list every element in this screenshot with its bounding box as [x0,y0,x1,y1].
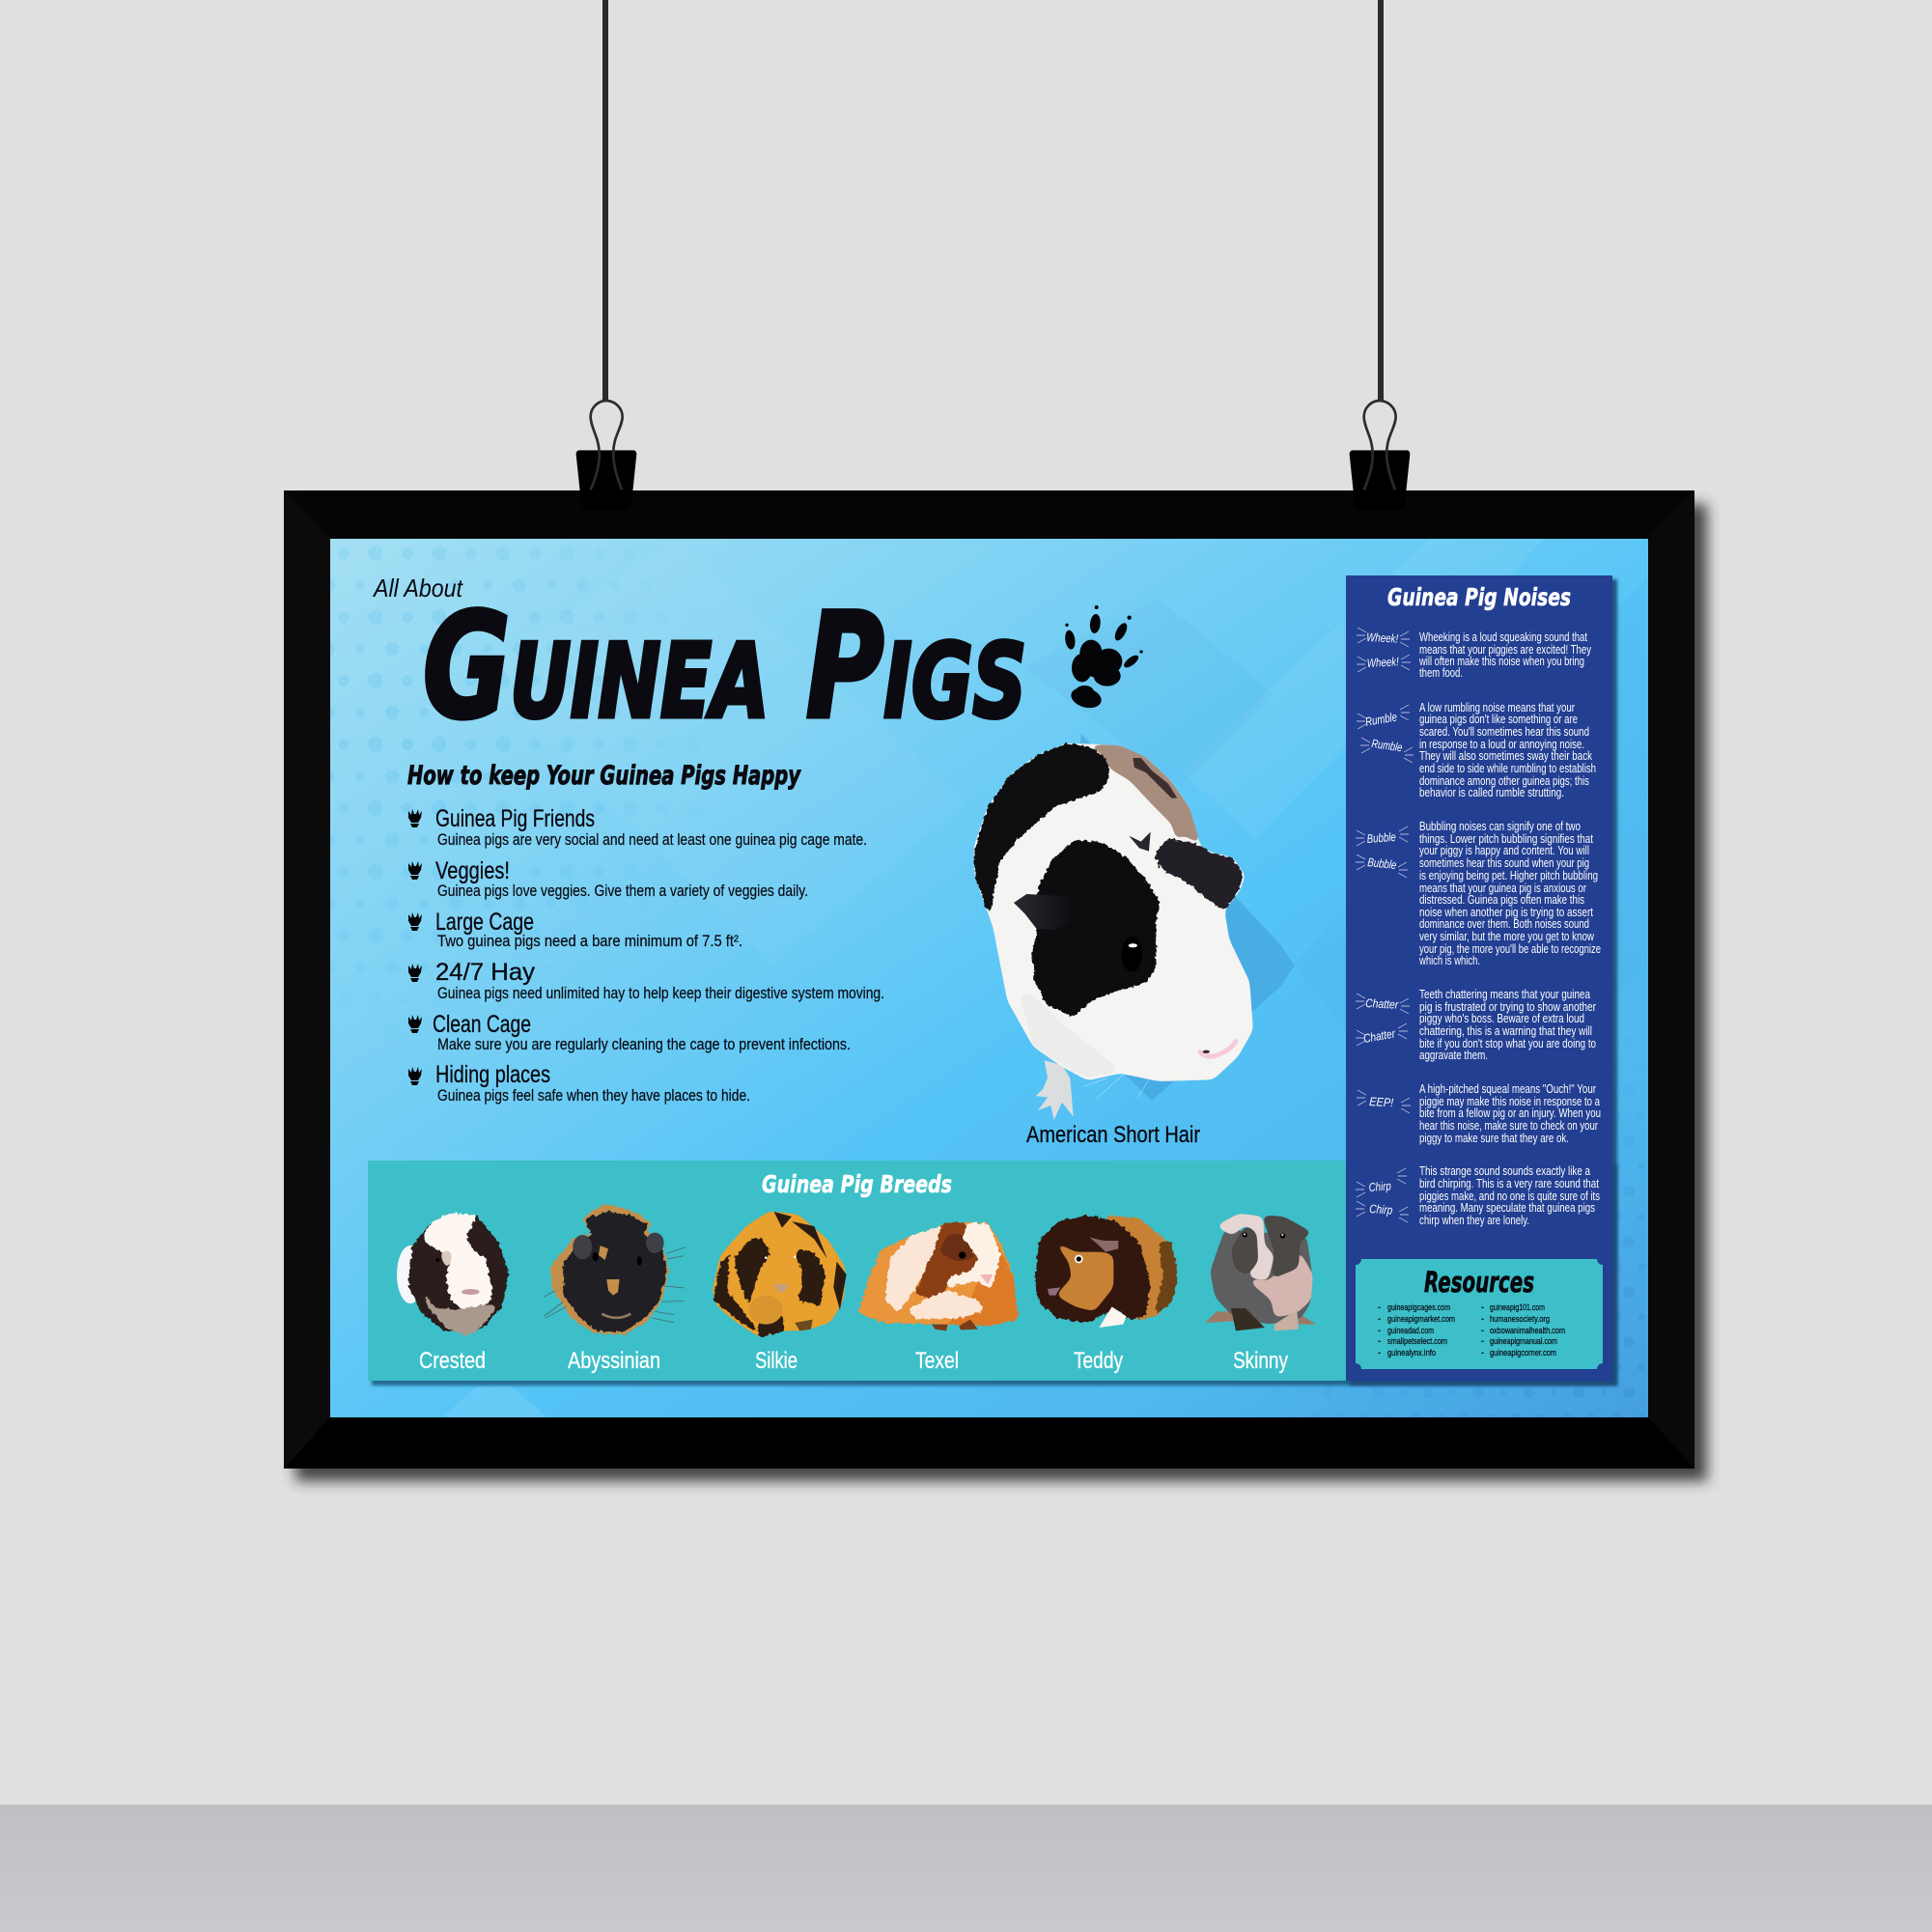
tip 3: Large Cage [435,909,534,936]
tip 5: Clean Cage [433,1011,531,1038]
resource links left column: guineapigcages.com [1387,1302,1450,1313]
noise: wheek: means that your piggies are excited! They [1419,642,1591,657]
noise: rumble: dominance among other guinea pigs; this [1419,773,1589,788]
noise: chirp: Chirp [1369,1202,1393,1218]
noise: rumble: A low rumbling noise means that your [1419,700,1575,714]
binder clip left [576,401,636,510]
label: Teddy: Teddy [1074,1348,1123,1374]
noise: rumble: behavior is called rumble strutting. [1419,785,1564,799]
breed: teddy [1035,1215,1179,1328]
label: Crested: Crested [419,1348,486,1374]
noise: chatter: bite if you don't stop what you are doing to [1419,1036,1596,1050]
heading: noises: Guinea Pig Noises [1387,583,1571,611]
noise: bubble: means that your guinea pig is anxious or [1419,881,1586,895]
resource links right column: - [1481,1348,1484,1358]
resource links right column: oxbowanimalhealth.com [1490,1326,1565,1336]
resource links left column: guineapigmarket.com [1387,1314,1455,1325]
noise: wheek [1357,628,1591,680]
tip 3: Two guinea pigs need a bare minimum of 7.5 ft². [437,932,742,950]
noise: bubble: things. Lower pitch bubbling signifies that [1419,831,1593,846]
noise: eep: piggie may make this noise in response to a [1419,1094,1601,1108]
noise: chatter: Chatter [1365,996,1399,1012]
resource links left column: guinealynx.info [1387,1348,1436,1358]
noise: eep: A high-pitched squeal means "Ouch!" Your [1419,1081,1596,1096]
heading: breeds: Guinea Pig Breeds [762,1170,952,1198]
resource links left column: smallpetselect.com [1387,1336,1447,1347]
noise: chirp: Chirp [1368,1179,1391,1194]
noise: rumble: guinea pigs don't like something or are [1419,712,1578,726]
noise: chatter: piggy who's boss. Beware of extra loud [1419,1011,1584,1025]
noise: bubble: Bubbling noises can signify one of two [1419,819,1581,833]
noise: bubble: sometimes hear this sound when your pig [1419,855,1589,870]
noise: chirp [1356,1163,1600,1227]
resource links right column: - [1481,1326,1484,1336]
noise: eep: EEP! [1369,1095,1394,1109]
resource links left column: - [1378,1314,1381,1325]
noise: eep [1357,1081,1601,1145]
tip 6 [408,1061,750,1105]
panel: guinea pig breeds [368,1161,1346,1381]
noise: eep: hear this noise, make sure to check on your [1419,1118,1598,1133]
noise: wheek: will often make this noise when you bring [1418,654,1584,668]
tip 2: Guinea pigs love veggies. Give them a variety of veggies daily. [437,882,808,900]
label: Skinny: Skinny [1233,1348,1288,1374]
illustration: American short hair guinea pig [974,743,1253,1120]
section: how to keep your guinea pigs happy [407,761,884,1105]
resource links right column: humanesociety.org [1490,1314,1550,1325]
resource links right column: - [1481,1314,1484,1325]
tip 1: Guinea pigs are very social and need at least one guinea pig cage mate. [437,830,867,849]
noise: eep: piggy to make sure that they are ok. [1419,1131,1569,1145]
tip 4 [408,959,884,1002]
tip 1 [408,805,867,849]
resource links right column: - [1481,1302,1484,1313]
hanging wire right [1378,0,1384,402]
resource links right column: guineapig101.com [1490,1302,1545,1313]
icon: paw print [1064,605,1143,711]
noise: chirp: meaning. Many speculate that guinea pigs [1419,1200,1595,1215]
caption: American Short Hair: American Short Hair [1026,1122,1200,1148]
noise: bubble: which is which. [1418,953,1480,967]
picture frame [284,490,1694,1469]
noise: rumble: They will also sometimes sway their back [1419,748,1592,763]
noise: bubble: dominance over them. Both noises sound [1419,916,1589,931]
noise: chatter: Teeth chattering means that your guinea [1419,987,1591,1001]
label: Texel: Texel [915,1348,959,1374]
noise: chirp: piggies make, and no one is quite sure of its [1419,1189,1600,1203]
resource links right column [1481,1302,1565,1358]
noise: chatter: chattering, this is a warning that they will [1419,1023,1592,1038]
noise: chatter [1356,987,1597,1062]
breed: skinny [1205,1214,1316,1330]
breed: texel [857,1222,1019,1330]
label: Abyssinian: Abyssinian [568,1348,660,1374]
noise: wheek: Wheek! [1366,630,1399,646]
noise: rumble: in response to a loud or annoying noise. [1419,737,1584,751]
resource links right column: guineapigmanual.com [1490,1336,1557,1347]
noise: rumble: Rumble [1371,737,1403,754]
noise: bubble: is enjoying being pet. Higher pitch bubbling [1419,868,1598,882]
heading: resources: Resources [1424,1266,1534,1299]
noise: bubble [1356,819,1601,967]
resource links left column: guineadad.com [1387,1326,1434,1336]
noise: rumble [1357,700,1596,799]
noise: chirp: bird chirping. This is a very rare sound that [1419,1176,1599,1190]
resource links left column [1378,1302,1455,1358]
noise: wheek: them food. [1419,665,1463,680]
noise: bubble: noise when another pig is trying to assert [1419,905,1593,919]
noise: rumble: end side to side while rumbling to establish [1419,761,1596,775]
tip 3 [408,909,742,950]
breed: abyssinian [544,1204,686,1335]
resource links left column: - [1378,1302,1381,1313]
hanging wire left [602,0,608,402]
panel: guinea pig noises [1346,575,1612,1381]
resource links right column: - [1481,1336,1484,1347]
tip 2: Veggies! [435,857,510,884]
tip 5 [408,1011,851,1053]
frame shadow [295,504,1707,1481]
binder clip right [1350,401,1410,510]
noise: chirp: This strange sound sounds exactly like a [1419,1163,1591,1178]
label: Silkie: Silkie [755,1348,798,1374]
noise: bubble: your pig, the more you'll be able to recognize [1419,941,1601,956]
noise: rumble: scared. You'll sometimes hear this sound [1419,724,1589,739]
small heading: All About: All About [372,574,464,602]
poster panel [330,539,1648,1417]
noise: wheek: Wheek! [1366,655,1400,670]
noise: bubble: your piggy is happy and content. You will [1419,843,1589,857]
tip 2 [408,857,808,900]
tip 4: Guinea pigs need unlimited hay to help keep their digestive system moving. [437,984,884,1002]
noise: eep: bite from a fellow pig or an injury. When you [1419,1106,1601,1120]
tip 1: Guinea Pig Friends [435,805,595,832]
floor [0,1805,1932,1932]
breed: crested [397,1213,509,1335]
resource links left column: - [1378,1326,1381,1336]
noise: chatter: pig is frustrated or trying to show another [1419,999,1597,1014]
noise: chirp: chirp when they are lonely. [1419,1213,1529,1227]
resource links left column: - [1378,1348,1381,1358]
panel shadow [372,1165,1617,1386]
noise: bubble: Bubble [1367,855,1397,872]
noise: wheek: Wheeking is a loud squeaking sound that [1419,630,1587,644]
breed: silkie [713,1211,847,1337]
tip 4: 24/7 Hay [435,959,536,986]
noise: bubble: distressed. Guinea pigs often make this [1419,892,1584,907]
title: Guinea Pigs: Guinea Pigs [423,583,1026,751]
noise: chatter: Chatter [1362,1026,1397,1046]
noise: bubble: very similar, but the more you get to know [1419,929,1594,943]
tip 5: Make sure you are regularly cleaning the cage to prevent infections. [437,1035,851,1053]
tip 6: Guinea pigs feel safe when they have places to hide. [437,1086,750,1105]
panel: resources [1356,1259,1603,1369]
tip 6: Hiding places [435,1061,550,1088]
resource links left column: - [1378,1336,1381,1347]
noise: rumble: Rumble [1364,710,1398,729]
noise: chatter: aggravate them. [1419,1048,1488,1062]
resource links right column: guineapigcorner.com [1490,1348,1556,1358]
heading: happy tips: How to keep Your Guinea Pigs Happy [407,761,801,791]
noise: bubble: Bubble [1366,830,1396,846]
